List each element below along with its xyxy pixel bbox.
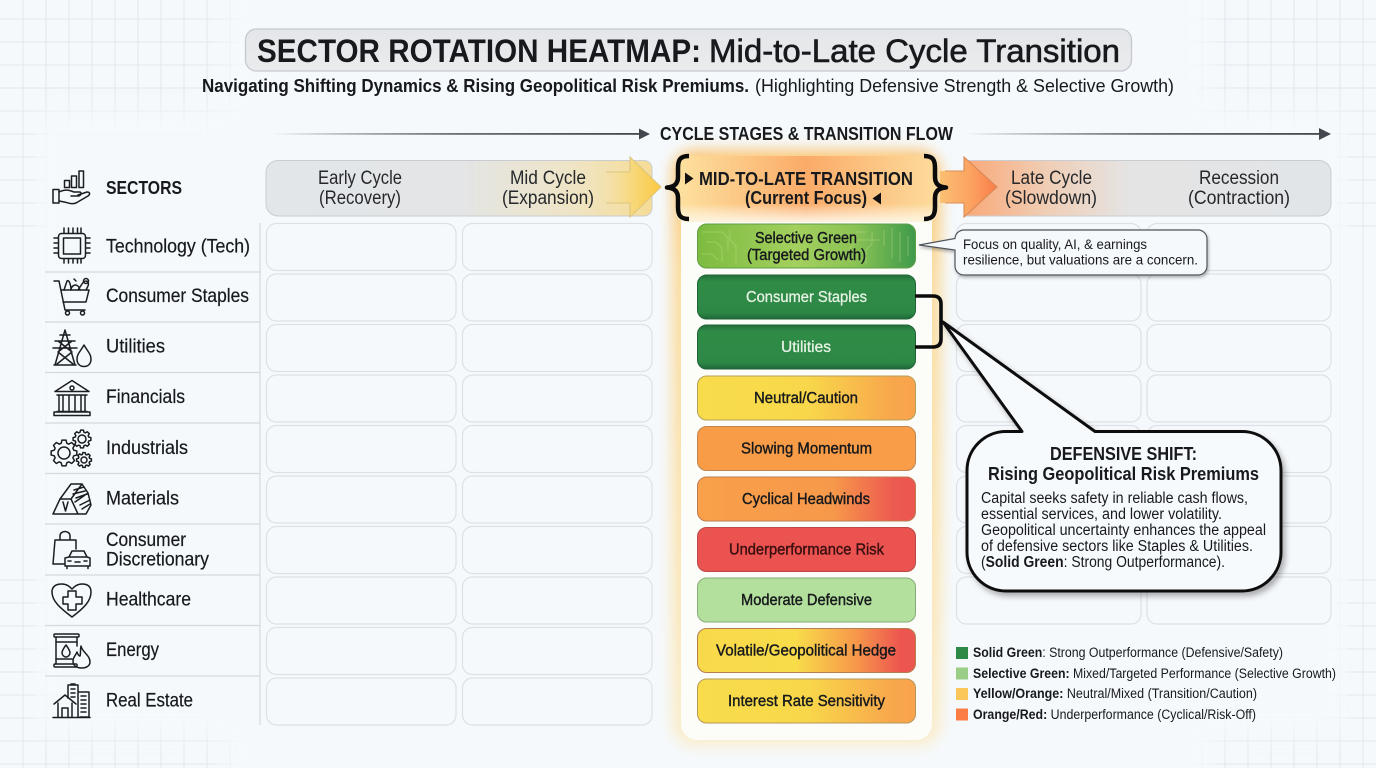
bar: underperformance risk — [698, 528, 916, 572]
callout: defensive shift: (Solid Green: Strong Outperformance). — [981, 554, 1225, 571]
row: real estate: Real Estate — [106, 690, 193, 712]
callout: defensive shift: Geopolitical uncertainty enhances the appeal — [981, 522, 1266, 539]
bar: cyclical headwinds: Cyclical Headwinds — [742, 491, 870, 508]
subtitle — [202, 76, 1174, 96]
legend: Yellow/Orange: Neutral/Mixed (Transition/Caution) — [973, 686, 1257, 701]
row: utilities — [53, 330, 165, 366]
callout: defensive shift: Rising Geopolitical Risk Premiums — [988, 464, 1259, 484]
row: consumer staples: Consumer Staples — [106, 285, 249, 307]
row: materials: Materials — [106, 488, 179, 510]
row: consumer discretionary: Discretionary — [106, 548, 209, 570]
row: consumer discretionary — [53, 529, 209, 570]
row: industrials — [51, 430, 188, 467]
row: real estate — [53, 684, 193, 718]
legend — [956, 645, 1336, 722]
bar: consumer staples: Consumer Staples — [746, 289, 867, 306]
callout: defensive shift: essential services, and lower volatility. — [981, 506, 1222, 523]
row: industrials: Industrials — [106, 437, 188, 459]
row: energy — [54, 634, 159, 668]
bar: slowing momentum: Slowing Momentum — [741, 440, 872, 458]
bar: underperformance risk: Underperformance Risk — [729, 542, 884, 558]
early and mid cycle header band: (Recovery) — [319, 188, 401, 209]
heatmap empty cells — [266, 224, 1331, 725]
callout: defensive shift: Capital seeks safety in reliable cash flows, — [981, 490, 1248, 507]
bar: selective green: (Targeted Growth) — [747, 247, 866, 264]
subtitle: Navigating Shifting Dynamics & Rising Geopolitical Risk Premiums. — [202, 76, 749, 96]
early and mid cycle header band: (Expansion) — [502, 188, 594, 209]
bar: slowing momentum — [698, 426, 916, 470]
bar: moderate defensive — [698, 578, 916, 622]
column heading: mid-to-late transition: (Current Focus) — [745, 187, 867, 208]
title: SECTOR ROTATION HEATMAP: — [257, 33, 701, 69]
bar: selective green: Selective Green — [755, 230, 857, 247]
title — [246, 29, 1132, 71]
row: technology: Technology (Tech) — [106, 236, 250, 258]
row: financials — [54, 380, 185, 416]
bar: cyclical headwinds — [698, 477, 916, 521]
cycle stages heading with flow arrows: CYCLE STAGES & TRANSITION FLOW — [660, 124, 953, 144]
callout: defensive shift: DEFENSIVE SHIFT: — [1050, 444, 1197, 464]
bar: volatile geopolitical hedge — [698, 628, 916, 672]
panel: current focus column — [672, 150, 941, 746]
late cycle and recession header band: Recession — [1199, 168, 1279, 189]
bar: neutral caution — [698, 376, 916, 420]
callout: defensive shift: of defensive sectors like Staples & Utilities. — [981, 538, 1253, 555]
bar: consumer staples — [698, 275, 916, 319]
bar: utilities: Utilities — [781, 339, 831, 356]
row: consumer discretionary: Consumer — [106, 529, 186, 551]
column heading: mid-to-late transition: MID-TO-LATE TRANSITION — [699, 168, 913, 189]
callout: selective growth note: Focus on quality, AI, & earnings — [963, 236, 1147, 252]
early and mid cycle header band: Early Cycle — [318, 168, 402, 189]
callout: selective growth note: resilience, but valuations are a concern. — [963, 252, 1198, 268]
row: healthcare: Healthcare — [106, 588, 191, 610]
bar: neutral caution: Neutral/Caution — [754, 390, 858, 407]
early and mid cycle header band — [266, 157, 661, 217]
heading: sectors: SECTORS — [106, 178, 182, 198]
row: materials — [53, 484, 179, 514]
subtitle: (Highlighting Defensive Strength & Selective Growth) — [755, 76, 1174, 96]
bar: volatile geopolitical hedge: Volatile/Geopolitical Hedge — [716, 642, 896, 660]
row: healthcare — [52, 584, 191, 617]
row: financials: Financials — [106, 386, 185, 408]
sector column dividers — [45, 223, 260, 725]
bar: selective green — [698, 224, 916, 268]
heading: sectors — [53, 171, 182, 204]
bar: utilities — [698, 325, 916, 369]
bar: interest rate sensitivity: Interest Rate Sensitivity — [728, 693, 885, 710]
row: consumer staples — [54, 278, 249, 315]
late cycle and recession header band: Late Cycle — [1011, 168, 1092, 189]
column heading: mid-to-late transition — [667, 156, 946, 219]
late cycle and recession header band — [940, 157, 1331, 217]
cycle stages heading with flow arrows — [272, 124, 1331, 144]
legend: Orange/Red: Underperformance (Cyclical/Risk-Off) — [973, 707, 1256, 722]
early and mid cycle header band: Mid Cycle — [510, 168, 586, 189]
legend: Solid Green: Strong Outperformance (Defensive/Safety) — [973, 645, 1283, 660]
bar: moderate defensive: Moderate Defensive — [741, 592, 872, 609]
callout: selective growth note — [919, 230, 1207, 275]
callout: defensive shift — [943, 322, 1281, 591]
bar: interest rate sensitivity — [698, 679, 916, 723]
row: technology — [54, 228, 250, 263]
row: utilities: Utilities — [106, 336, 165, 358]
bracket linking staples and utilities — [915, 296, 941, 347]
late cycle and recession header band: (Contraction) — [1188, 188, 1290, 209]
row: energy: Energy — [106, 639, 159, 661]
title: Mid-to-Late Cycle Transition — [709, 33, 1120, 69]
late cycle and recession header band: (Slowdown) — [1005, 188, 1097, 209]
legend: Selective Green: Mixed/Targeted Performance (Selective Growth) — [973, 666, 1336, 681]
